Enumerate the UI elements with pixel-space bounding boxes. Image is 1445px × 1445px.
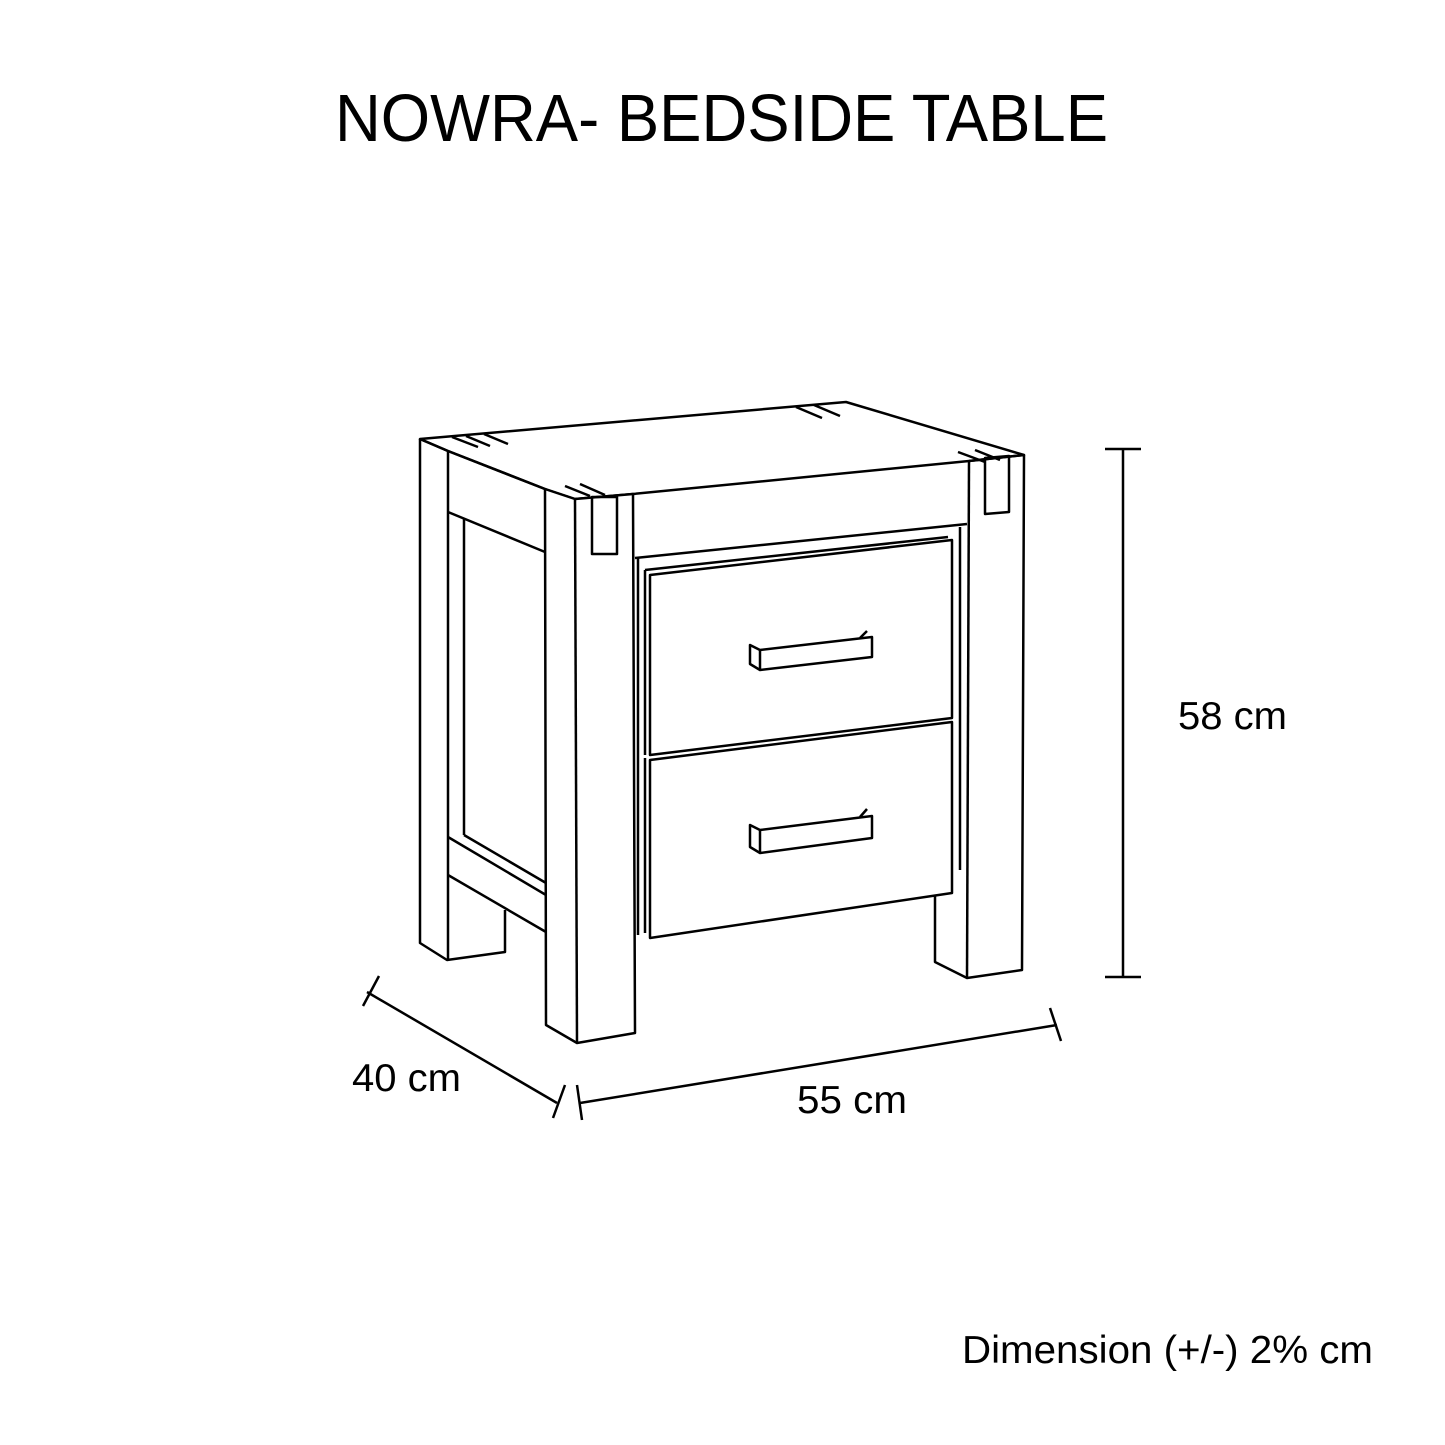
title: NOWRA- BEDSIDE TABLE: [335, 81, 1108, 156]
apron and frame: [635, 524, 967, 935]
front left leg: [545, 489, 635, 1043]
bedside table drawing: [420, 402, 1024, 1043]
dimension: width: [577, 1008, 1061, 1120]
left back leg and side: [420, 439, 546, 960]
footnote: Dimension (+/-) 2% cm: [962, 1329, 1373, 1372]
label: 58 cm: 58 cm: [1178, 695, 1287, 738]
handle 1: [750, 631, 872, 670]
dimension: height: [1105, 449, 1141, 977]
right back leg: [935, 455, 1024, 978]
label: 40 cm: 40 cm: [352, 1057, 461, 1100]
label: 55 cm: 55 cm: [797, 1079, 907, 1122]
dimension: depth: [363, 976, 565, 1118]
table top: [420, 402, 1024, 499]
drawer 1: [645, 537, 952, 755]
handle 2: [750, 809, 872, 853]
drawer 2: [645, 722, 952, 938]
